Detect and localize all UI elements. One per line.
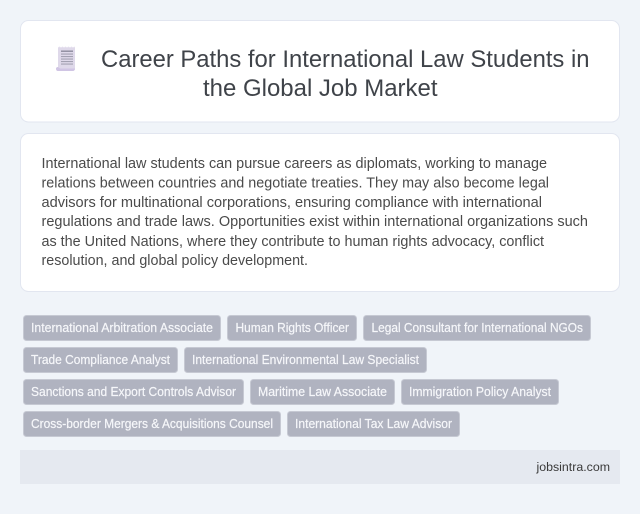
tag: International Arbitration Associate: International Arbitration Associate xyxy=(31,321,213,335)
tag: International Tax Law Advisor xyxy=(288,412,460,436)
title: the Global Job Market xyxy=(203,75,438,102)
description text: relations between countries and negotiate treaties. They may also become legal xyxy=(42,176,549,192)
panel: header card xyxy=(20,20,620,122)
tag: Legal Consultant for International NGOs: Legal Consultant for International NGOs xyxy=(372,321,583,335)
description text: as the United Nations, where they contribute to human rights advocacy, conflict xyxy=(42,234,544,250)
footer source text: jobsintra.com xyxy=(536,460,610,474)
panel: description card xyxy=(20,134,620,292)
tag: Sanctions and Export Controls Advisor: Sanctions and Export Controls Advisor xyxy=(31,385,236,399)
tag: Maritime Law Associate xyxy=(250,380,394,404)
panel: career tags xyxy=(24,316,590,436)
tag: Trade Compliance Analyst xyxy=(24,348,178,372)
description text xyxy=(42,156,588,269)
title: Career Paths for International Law Students in xyxy=(101,46,590,73)
tag: Sanctions and Export Controls Advisor xyxy=(24,380,244,404)
tag: International Arbitration Associate xyxy=(24,316,220,340)
description text: regulations and trade laws. Opportunities exist within international organizations such xyxy=(42,214,588,230)
tag: Human Rights Officer: Human Rights Officer xyxy=(236,321,349,335)
tag: Human Rights Officer xyxy=(228,316,356,340)
footer bar xyxy=(20,450,620,484)
tag: International Environmental Law Specialist: International Environmental Law Specialist xyxy=(192,353,419,367)
tag: Trade Compliance Analyst: Trade Compliance Analyst xyxy=(31,353,170,367)
tag: Cross-border Mergers & Acquisitions Counsel: Cross-border Mergers & Acquisitions Counsel xyxy=(31,417,273,431)
description text: advisors for multinational corporations, ensuring compliance with international xyxy=(42,195,542,211)
tag: Immigration Policy Analyst: Immigration Policy Analyst xyxy=(409,385,551,399)
tag: International Tax Law Advisor: International Tax Law Advisor xyxy=(295,417,452,431)
title xyxy=(101,46,590,102)
tag: Maritime Law Associate: Maritime Law Associate xyxy=(258,385,387,399)
tag: Immigration Policy Analyst xyxy=(402,380,558,404)
tag: Cross-border Mergers & Acquisitions Counsel xyxy=(24,412,280,436)
tag: Legal Consultant for International NGOs xyxy=(364,316,590,340)
description text: International law students can pursue careers as diplomats, working to manage xyxy=(42,156,547,172)
tag: International Environmental Law Specialist xyxy=(184,348,426,372)
icon: paper scroll xyxy=(56,46,75,71)
description text: resolution, and global policy development. xyxy=(42,253,308,269)
